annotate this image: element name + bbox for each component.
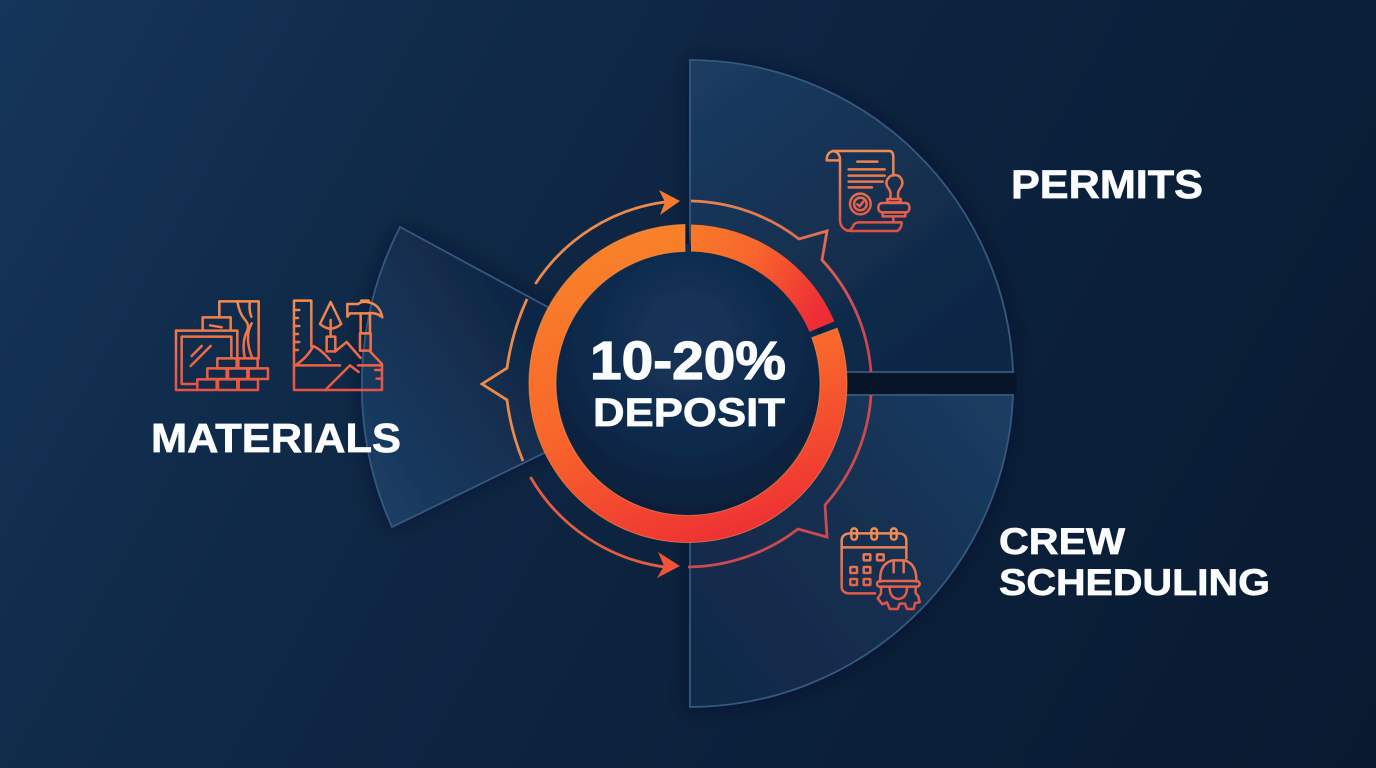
label: PERMITS: PERMITS [1011, 163, 1203, 207]
panel: crew scheduling wedge [690, 395, 1013, 707]
ring: main deposit segment [529, 224, 847, 542]
ring: permits segment [691, 224, 834, 332]
icon: calendar with hard hat and gear [842, 528, 920, 609]
label: CREW SCHEDULING [999, 521, 1270, 603]
heading: DEPOSIT: DEPOSIT [593, 391, 785, 435]
arrow: top-left to permits [536, 190, 680, 283]
panel: materials wedge [362, 227, 688, 527]
icon: permit document with stamp [827, 151, 909, 231]
arrow: crew scheduling arc [688, 395, 871, 567]
label: MATERIALS: MATERIALS [151, 415, 401, 461]
icon: building materials (window, bricks, lumber) [176, 301, 268, 390]
heading: 10-20%: 10-20% [590, 331, 786, 391]
dark gap between right wedges [845, 374, 1017, 394]
arrow: permits arc [691, 201, 871, 372]
arrow: bottom-left to crew [531, 478, 680, 578]
icon: tools (ruler, trowel, hammer, sand) [294, 301, 382, 390]
label: CREW SCHEDULING: SCHEDULING [999, 562, 1270, 603]
arrow: materials arc [482, 299, 527, 461]
label: CREW SCHEDULING: CREW [999, 521, 1125, 562]
center disc [548, 244, 828, 524]
panel: permits wedge [690, 60, 1013, 372]
